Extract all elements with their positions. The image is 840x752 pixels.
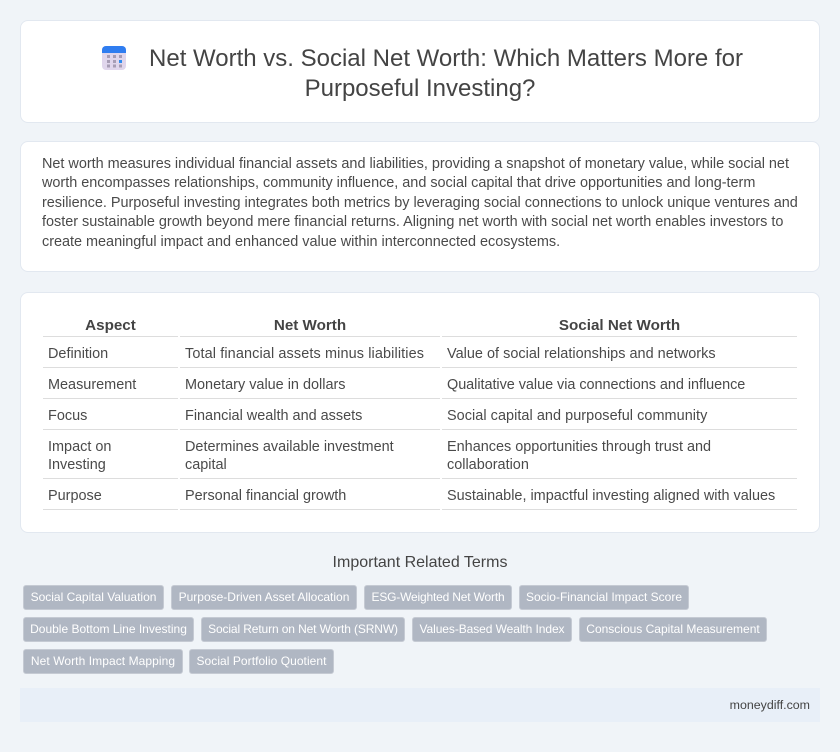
comparison table: Total financial assets minus liabilities (185, 346, 424, 362)
heading: related terms: Important Related Terms (333, 554, 507, 571)
comparison table: collaboration (447, 457, 529, 473)
related term tags: Conscious Capital Measurement (586, 622, 760, 636)
comparison table: Aspect (85, 317, 136, 334)
comparison table: Measurement (48, 377, 136, 393)
title: Net Worth vs. Social Net Worth: Which Matters More for (149, 45, 743, 72)
summary text: resilience. Purposeful investing integrates both metrics by leveraging social connections to unlock unique ventures and (42, 194, 798, 210)
panel: title header (20, 20, 820, 123)
comparison table: Impact on (48, 439, 111, 455)
comparison table: Definition (48, 346, 108, 362)
comparison table: Purpose (48, 488, 102, 504)
comparison table: Financial wealth and assets (185, 408, 362, 424)
related term tags: Social Capital Valuation (31, 590, 156, 604)
related term tags: Net Worth Impact Mapping (31, 654, 175, 668)
title (149, 45, 743, 102)
comparison table (43, 317, 797, 510)
comparison table: Social capital and purposeful community (447, 408, 707, 424)
comparison table: Investing (48, 457, 106, 473)
summary text: foster sustainable growth beyond mere financial returns. Aligning net worth with social net worth enables investors to (42, 214, 783, 230)
panel: summary (20, 141, 820, 272)
footer source: moneydiff.com (730, 698, 810, 712)
panel: comparison table (20, 292, 820, 533)
summary text: create meaningful impact and enhanced value within interconnected ecosystems. (42, 234, 560, 250)
summary text: Net worth measures individual financial assets and liabilities, providing a snapshot of monetary value, while social net (42, 156, 789, 172)
comparison table: Net Worth (274, 317, 346, 334)
related term tags: ESG-Weighted Net Worth (372, 590, 504, 604)
comparison table: Sustainable, impactful investing aligned with values (447, 488, 775, 504)
comparison table: Determines available investment (185, 439, 394, 455)
summary text (42, 156, 798, 250)
summary text: worth encompasses relationships, community influence, and social capital that drive opportunities and long-term (42, 175, 755, 191)
footer bar (20, 688, 820, 722)
comparison table: Qualitative value via connections and influence (447, 377, 745, 393)
comparison table: Personal financial growth (185, 488, 346, 504)
comparison table: Value of social relationships and networks (447, 346, 716, 362)
comparison table: capital (185, 457, 227, 473)
comparison table: Social Net Worth (559, 317, 680, 334)
related term tags: Social Return on Net Worth (SRNW) (208, 622, 398, 636)
comparison table: Focus (48, 408, 87, 424)
comparison table: Monetary value in dollars (185, 377, 346, 393)
related term tags: Values-Based Wealth Index (420, 622, 564, 636)
related term tags: Double Bottom Line Investing (30, 622, 187, 636)
related term tags (23, 585, 767, 674)
title: Purposeful Investing? (305, 75, 535, 102)
related term tags: Social Portfolio Quotient (196, 654, 326, 668)
comparison table: Enhances opportunities through trust and (447, 439, 711, 455)
icon: calendar (102, 46, 126, 70)
related term tags: Purpose-Driven Asset Allocation (179, 590, 349, 604)
related term tags: Socio-Financial Impact Score (526, 590, 682, 604)
